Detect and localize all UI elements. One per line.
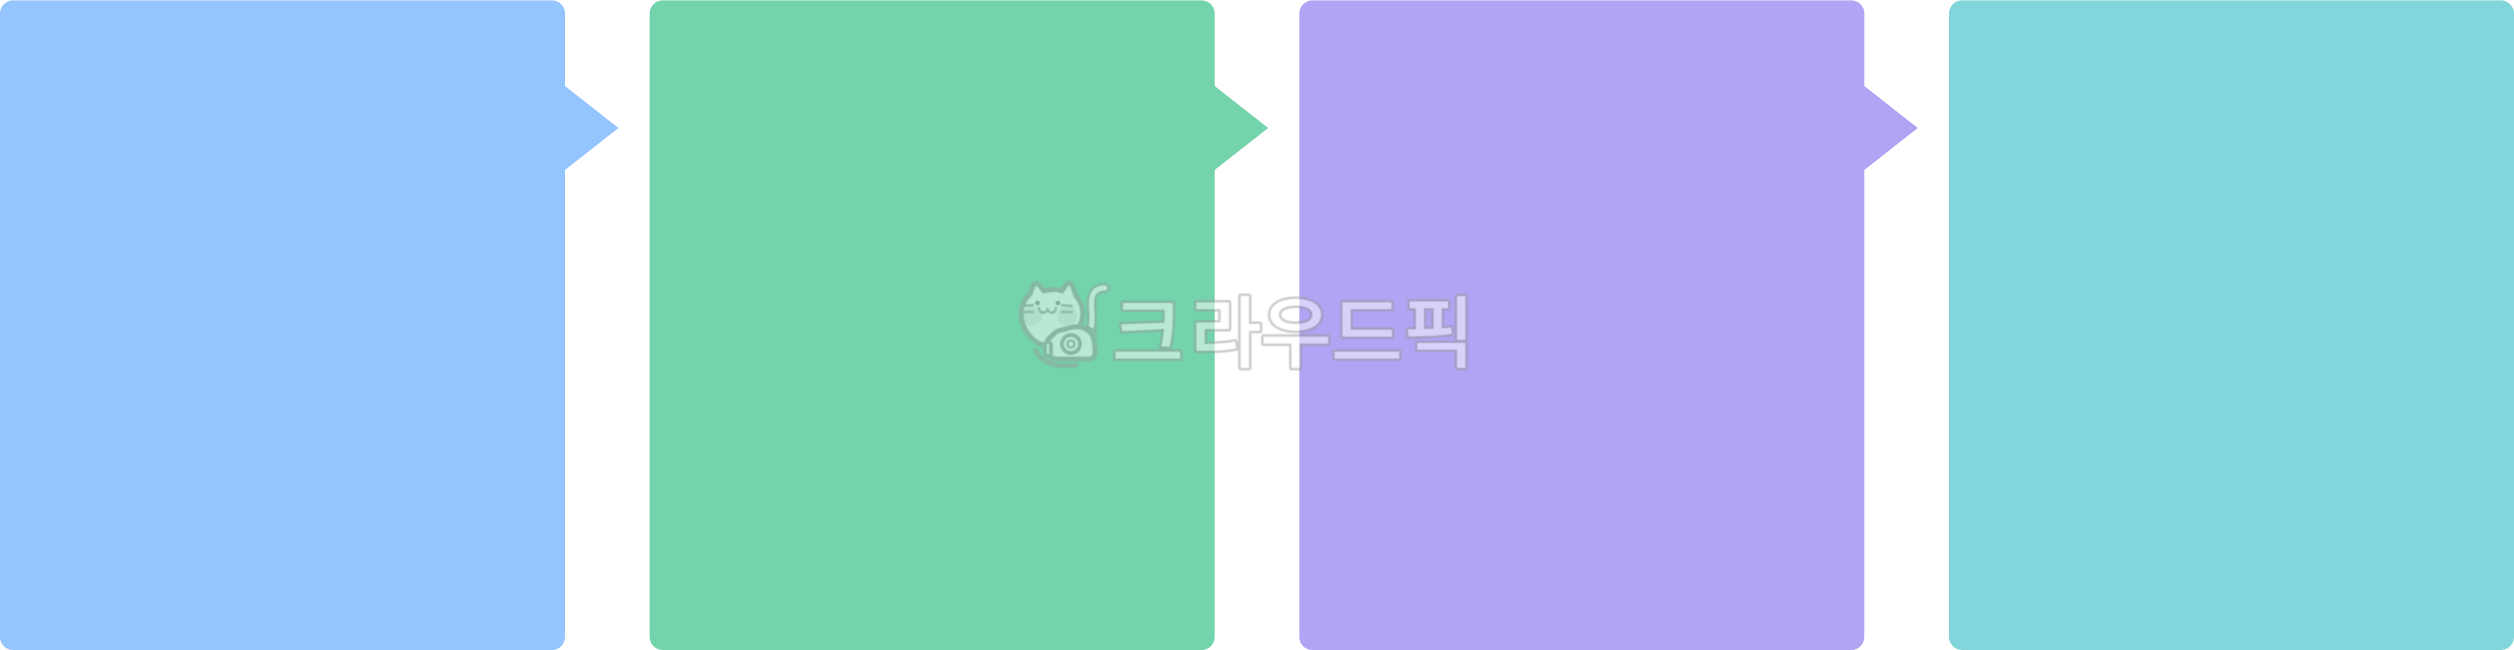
wordmark text: 크라우드픽 <box>1112 290 1475 378</box>
panel: purple with right arrow <box>1299 0 1918 650</box>
icon: camera lens <box>1062 335 1080 353</box>
panel: teal <box>1949 0 2514 650</box>
icon: cat tail <box>1091 288 1105 328</box>
icon: cat left eye <box>1035 301 1040 305</box>
icon: camera top button <box>1087 329 1094 333</box>
panel: green with right arrow <box>650 0 1268 650</box>
icon: cat lower body arc <box>1036 350 1076 366</box>
icon: cat tail inner <box>1091 288 1105 328</box>
icon: cat left cheek <box>1022 306 1042 326</box>
icon: camera lens centre <box>1068 340 1074 348</box>
icon: cat holding camera <box>1021 283 1105 366</box>
icon: left whiskers <box>1023 305 1033 312</box>
icon: cat right cheek <box>1057 306 1077 326</box>
icon: cat mouth <box>1039 308 1056 313</box>
icon: cat body <box>1021 283 1083 346</box>
icon: camera side grip <box>1045 342 1051 356</box>
icon: cat right eye <box>1056 301 1060 305</box>
icon: camera body <box>1046 327 1095 359</box>
icon: right whiskers <box>1062 305 1072 312</box>
watermark: cat with camera and wordmark <box>1021 283 1475 378</box>
panel: blue with right arrow <box>0 0 618 650</box>
